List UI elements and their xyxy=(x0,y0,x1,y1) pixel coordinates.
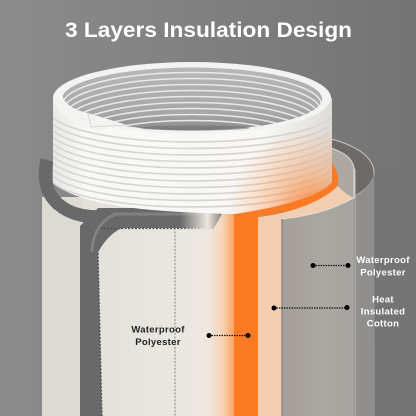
collar inner threads xyxy=(55,68,322,130)
callout: heat insulated cotton xyxy=(272,294,405,330)
outer translucent strip xyxy=(355,173,375,416)
callout: heat insulated cotton: Insulated xyxy=(361,306,405,318)
callout: outer waterproof polyester: Waterproof xyxy=(356,255,410,266)
grey polyester layer xyxy=(282,198,354,416)
cutaway layers xyxy=(258,173,375,416)
cutaway rim: orange xyxy=(234,160,338,416)
callout: inner waterproof polyester: Waterproof xyxy=(131,324,185,336)
callout: inner waterproof polyester: Polyester xyxy=(135,337,181,348)
peach cotton layer xyxy=(258,186,354,416)
cotton layer rim xyxy=(320,148,354,212)
title: 3 Layers Insulation Design xyxy=(65,18,352,42)
fabric outer wrap xyxy=(42,197,237,416)
collar ribs xyxy=(53,118,332,207)
callout: outer waterproof polyester: Polyester xyxy=(360,268,406,278)
grey binding xyxy=(45,160,226,416)
white ribbed hose collar xyxy=(53,62,332,216)
callout: outer waterproof polyester xyxy=(310,255,410,278)
outer translucent polyester rim xyxy=(331,139,374,196)
callout: heat insulated cotton: Cotton xyxy=(367,318,399,330)
callout: heat insulated cotton: Heat xyxy=(372,294,394,306)
callout: inner waterproof polyester xyxy=(131,324,250,348)
